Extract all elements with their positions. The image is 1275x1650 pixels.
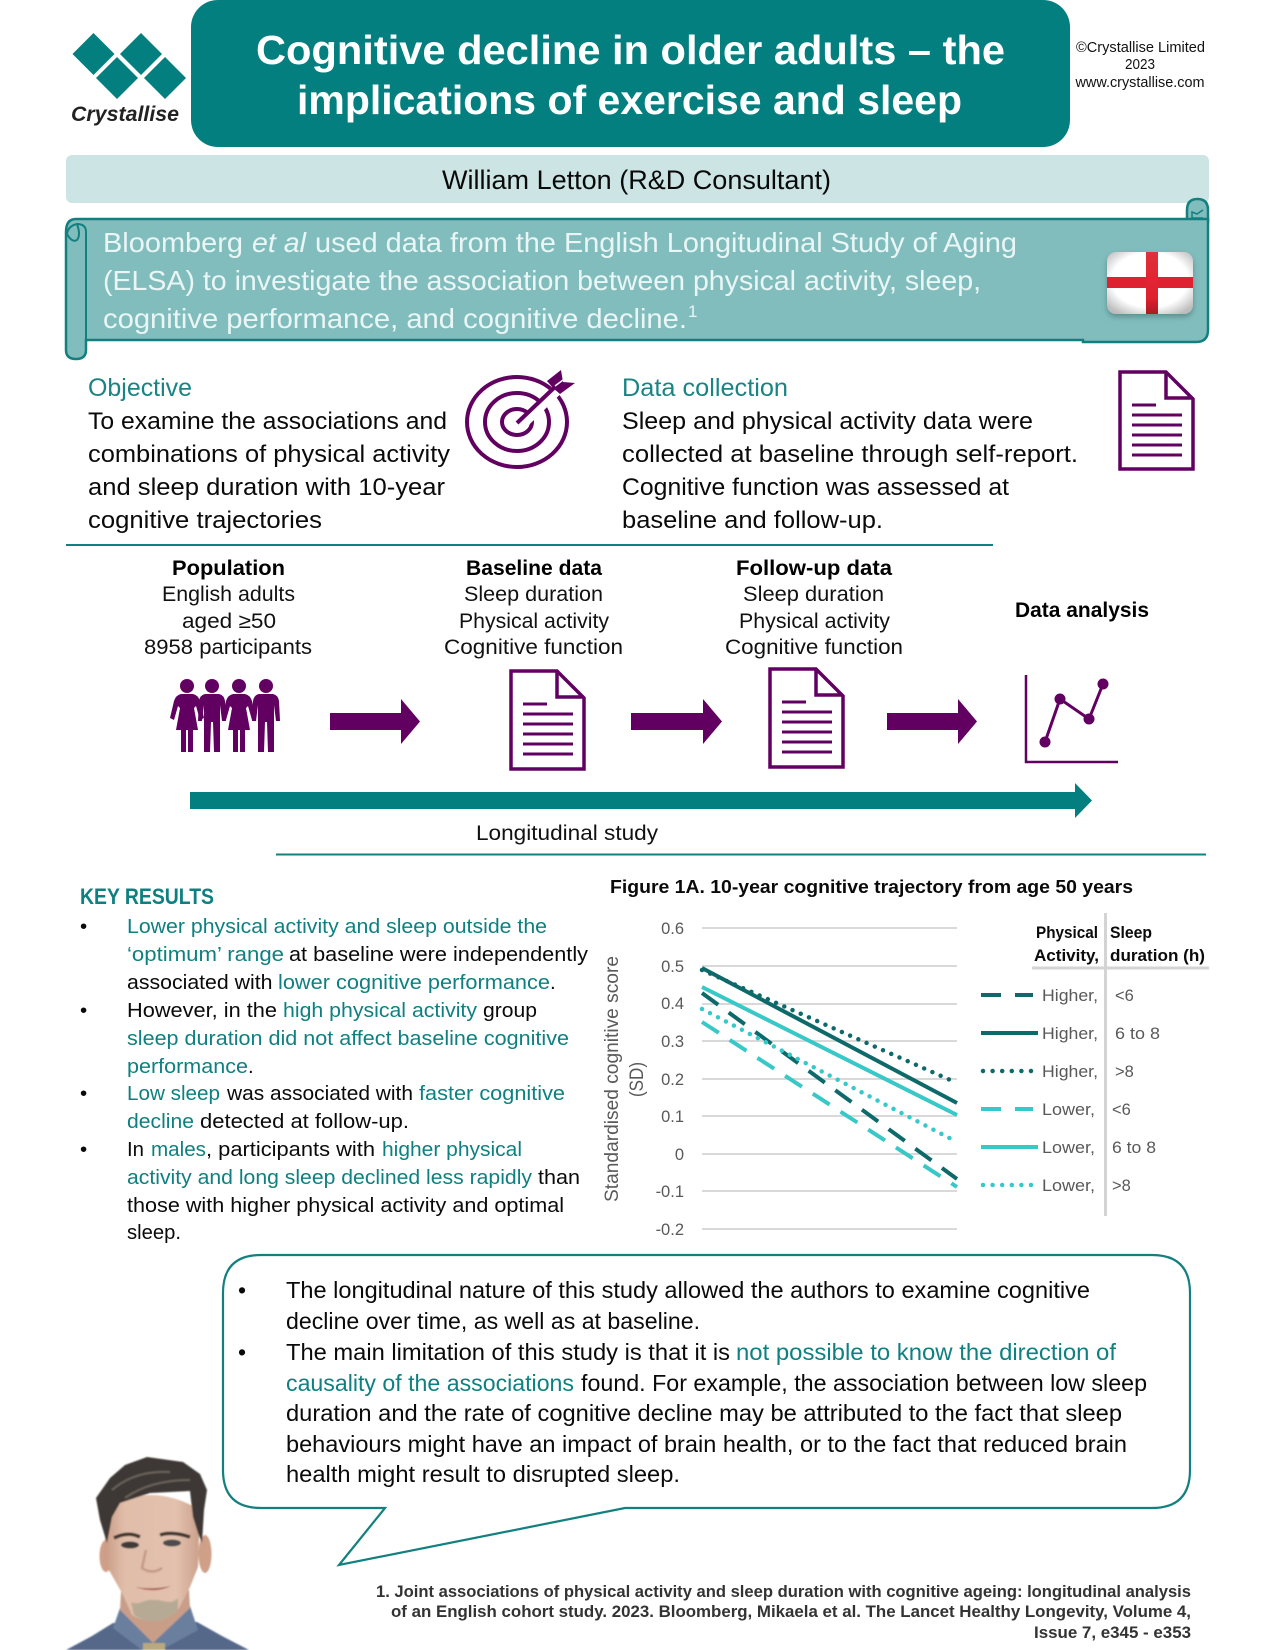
speech bubble: study commentary: The longitudinal nature of this study allowed the authors to examine cognitive: [286, 1277, 1090, 1303]
key results: •: [80, 915, 87, 938]
speech bubble: study commentary: causality of the associations: [286, 1370, 574, 1396]
key results: •: [80, 999, 87, 1022]
objective block: To examine the associations and: [88, 408, 447, 435]
baseline data column: Physical activity: [459, 610, 609, 633]
chart legend: Higher,: [1042, 987, 1098, 1005]
baseline data column: Cognitive function: [444, 636, 623, 659]
line chart: cognitive trajectory: 0.3: [661, 1033, 684, 1051]
key results: Lower physical activity and sleep outside the: [127, 915, 547, 938]
line chart: cognitive trajectory: 0.5: [661, 958, 684, 976]
speech bubble: study commentary: behaviours might have an impact of brain health, or to the fact that reduced brain: [286, 1431, 1127, 1457]
key results: was associated with: [226, 1082, 413, 1105]
icon: target with arrow: [467, 370, 575, 467]
key results: activity and long sleep declined less rapidly: [127, 1166, 533, 1189]
line chart: cognitive trajectory: [602, 920, 957, 1239]
icon: document: [1120, 372, 1193, 469]
key results: decline: [127, 1110, 194, 1133]
speech bubble: study commentary: not possible to know the direction of: [736, 1339, 1117, 1365]
data analysis heading: Data analysis: [1015, 598, 1149, 622]
baseline data column: Sleep duration: [464, 583, 603, 606]
logo: Crystallise: [71, 33, 186, 126]
follow-up data column: Follow-up data: [736, 556, 893, 580]
speech bubble: study commentary: found. For example, the association between low sleep: [581, 1370, 1147, 1396]
key results: those with higher physical activity and optimal: [127, 1194, 564, 1217]
key results: high physical activity: [283, 999, 478, 1022]
key results: faster cognitive: [419, 1082, 565, 1105]
key results: at baseline were independently: [289, 943, 589, 966]
scroll panel: study summary: used data from the English Longitudinal Study of Aging: [315, 227, 1017, 258]
data collection block: baseline and follow-up.: [622, 507, 883, 534]
title banner: [191, 0, 1070, 147]
chart legend: 6 to 8: [1115, 1025, 1160, 1043]
arrow: follow-up to analysis: [887, 699, 977, 744]
objective block: and sleep duration with 10-year: [88, 474, 445, 501]
population column: [144, 556, 312, 659]
key results: •: [80, 1082, 87, 1105]
chart legend: [981, 913, 1209, 1216]
reference citation: [376, 1582, 1191, 1642]
chart legend: Lower,: [1042, 1101, 1095, 1119]
key results: [80, 884, 589, 1244]
reference citation: Issue 7, e345 - e353: [1034, 1623, 1191, 1642]
key results: higher physical: [382, 1138, 522, 1161]
baseline data column: [444, 556, 623, 659]
speech bubble: study commentary: •: [238, 1339, 246, 1365]
key results: sleep duration did not affect baseline cognitive: [127, 1027, 569, 1050]
population column: English adults: [162, 583, 295, 606]
chart legend: Lower,: [1042, 1177, 1095, 1195]
follow-up data column: Cognitive function: [725, 636, 903, 659]
arrow: longitudinal timeline: [190, 783, 1092, 818]
chart legend: Physical: [1036, 924, 1098, 942]
portrait of author: [66, 1457, 249, 1650]
speech bubble: study commentary: [223, 1255, 1190, 1565]
follow-up data column: Physical activity: [739, 610, 891, 633]
icon: line chart: [1026, 675, 1118, 762]
follow-up data column: [725, 556, 903, 659]
scroll panel: study summary: (ELSA) to investigate the association between physical activity, sleep,: [103, 265, 981, 296]
author bar: William Letton (R&D Consultant): [442, 165, 831, 195]
chart legend: >8: [1115, 1063, 1134, 1081]
speech bubble: study commentary: •: [238, 1277, 246, 1303]
line chart: cognitive trajectory: 0: [675, 1146, 684, 1164]
chart legend: 6 to 8: [1112, 1139, 1156, 1157]
figure title: Figure 1A. 10-year cognitive trajectory from age 50 years: [610, 876, 1133, 897]
scroll panel: study summary: cognitive performance, and cognitive decline.: [103, 303, 687, 334]
key results: .: [248, 1055, 254, 1078]
objective block: cognitive trajectories: [88, 507, 322, 534]
key results heading: KEY RESULTS: [80, 884, 214, 909]
chart legend: Lower,: [1042, 1139, 1095, 1157]
author bar: [66, 155, 1209, 203]
key results: lower cognitive performance: [278, 971, 550, 994]
title banner: implications of exercise and sleep: [297, 77, 962, 123]
objective block: Objective: [88, 374, 192, 402]
scroll panel: study summary: Bloomberg: [103, 227, 243, 258]
icon: baseline document: [511, 671, 584, 769]
key results: However, in the: [127, 999, 277, 1022]
line chart: cognitive trajectory: Standardised cognitive score: [602, 956, 623, 1202]
key results: performance: [127, 1055, 248, 1078]
key results: males: [151, 1138, 206, 1161]
reference citation: of an English cohort study. 2023. Bloomberg, Mikaela et al. The Lancet Healthy Longevity, Volume 4,: [391, 1602, 1191, 1621]
key results: than: [538, 1166, 580, 1189]
chart legend: duration (h): [1110, 947, 1205, 965]
speech bubble: study commentary: health might result to disrupted sleep.: [286, 1461, 680, 1487]
data collection block: [622, 374, 1078, 534]
copyright note: 2023: [1125, 57, 1155, 73]
speech bubble: study commentary: duration and the rate of cognitive decline may be attributed to the fact that sleep: [286, 1400, 1122, 1426]
line chart: cognitive trajectory: -0.1: [656, 1183, 684, 1201]
copyright note: www.crystallise.com: [1075, 75, 1204, 91]
key results: ‘optimum’ range: [127, 943, 284, 966]
chart legend: Activity,: [1034, 947, 1099, 965]
data collection block: Sleep and physical activity data were: [622, 408, 1033, 435]
follow-up data column: Sleep duration: [743, 583, 884, 606]
scroll panel: study summary: 1: [688, 302, 697, 321]
key results: sleep.: [127, 1221, 181, 1244]
title banner: Cognitive decline in older adults – the: [256, 27, 1005, 73]
chart legend: >8: [1112, 1177, 1131, 1195]
chart legend: <6: [1112, 1101, 1131, 1119]
key results: •: [80, 1138, 87, 1161]
chart legend: <6: [1115, 987, 1134, 1005]
speech bubble: study commentary: decline over time, as well as at baseline.: [286, 1308, 700, 1334]
arrow: baseline to follow-up: [631, 699, 722, 744]
line chart: cognitive trajectory: 0.2: [661, 1071, 684, 1089]
population column: 8958 participants: [144, 636, 312, 659]
line chart: cognitive trajectory: -0.2: [656, 1221, 684, 1239]
icon: England flag: [1107, 252, 1193, 314]
data collection block: collected at baseline through self-report.: [622, 441, 1078, 468]
key results: In: [127, 1138, 144, 1161]
data collection block: Cognitive function was assessed at: [622, 474, 1009, 501]
key results: .: [550, 971, 556, 994]
line chart: cognitive trajectory: 0.1: [661, 1108, 684, 1126]
line chart: cognitive trajectory: 0.4: [661, 995, 684, 1013]
arrow: population to baseline: [330, 699, 420, 744]
timeline label: Longitudinal study: [476, 822, 659, 845]
scroll panel: study summary: et al: [252, 227, 307, 258]
scroll panel: study summary: [66, 199, 1208, 359]
chart legend: Higher,: [1042, 1063, 1098, 1081]
baseline data column: Baseline data: [466, 556, 603, 580]
chart legend: Sleep: [1110, 924, 1152, 942]
data collection block: Data collection: [622, 374, 788, 402]
icon: group of people: [170, 679, 280, 752]
key results: Low sleep: [127, 1082, 220, 1105]
line chart: cognitive trajectory: 0.6: [661, 920, 684, 938]
speech bubble: study commentary: The main limitation of this study is that it is: [286, 1339, 730, 1365]
reference citation: 1. Joint associations of physical activity and sleep duration with cognitive ageing: longitudinal analysis: [376, 1582, 1191, 1601]
chart legend: Higher,: [1042, 1025, 1098, 1043]
copyright note: [1075, 40, 1205, 91]
key results: detected at follow-up.: [200, 1110, 409, 1133]
key results: , participants with: [206, 1138, 375, 1161]
line chart: cognitive trajectory: (SD): [627, 1062, 648, 1097]
population column: Population: [172, 556, 285, 580]
icon: follow-up document: [770, 669, 843, 767]
key results: associated with: [127, 971, 272, 994]
copyright note: ©Crystallise Limited: [1076, 40, 1205, 56]
objective block: combinations of physical activity: [88, 441, 451, 468]
logo: Crystallise: Crystallise: [71, 103, 179, 126]
population column: aged ≥50: [182, 610, 276, 633]
objective block: [88, 374, 451, 534]
key results: group: [483, 999, 537, 1022]
